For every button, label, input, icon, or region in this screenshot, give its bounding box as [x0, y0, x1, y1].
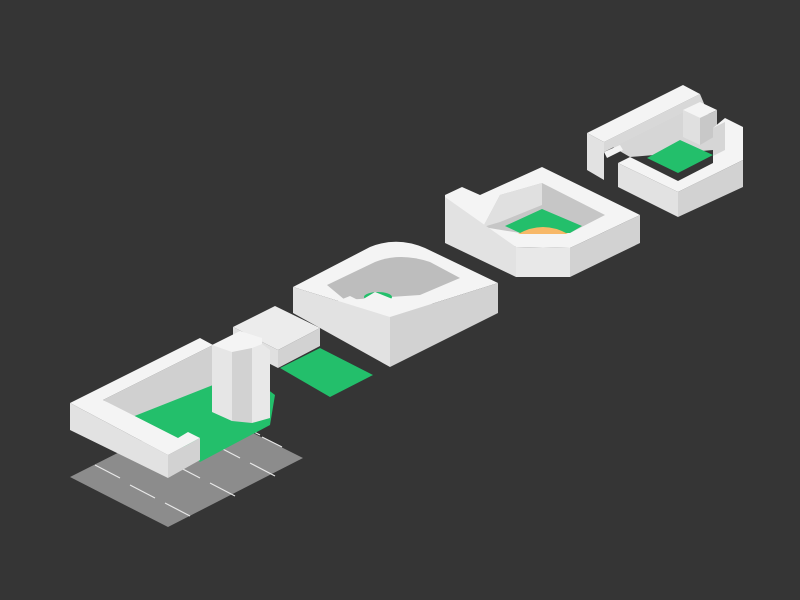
building 1: C-shaped block: [70, 338, 275, 478]
building 3: pentagon block: [445, 167, 640, 277]
green pad: [280, 348, 373, 397]
building 4: back bar and C block: [587, 85, 743, 217]
connector block: [233, 306, 320, 368]
parking lot: [70, 409, 303, 527]
building 2: D-shaped block: [293, 242, 498, 367]
tower: [212, 331, 270, 423]
